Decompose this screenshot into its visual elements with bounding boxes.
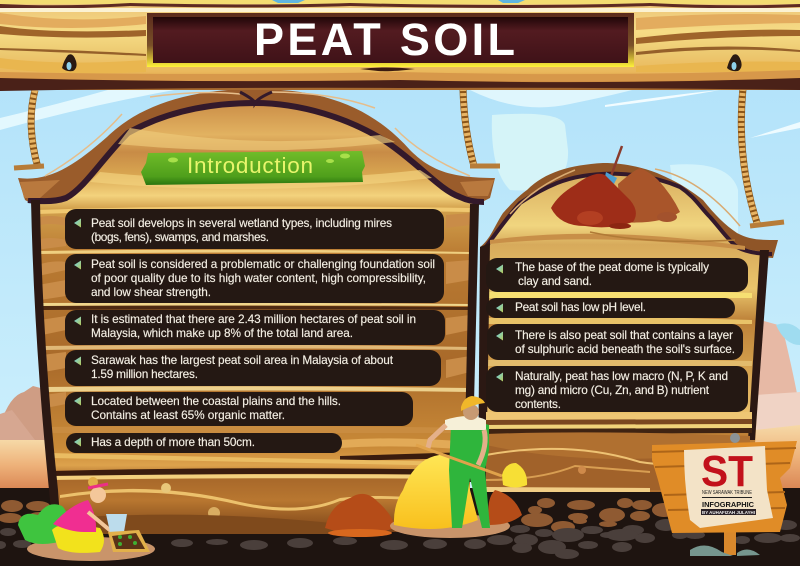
bullet: wetland types: Peat soil develops in several wetland types, including mires	[91, 216, 392, 230]
bullet: peat dome base: The base of the peat dome is typically	[515, 260, 709, 274]
plank streaks	[36, 213, 470, 408]
left sign body	[31, 103, 478, 532]
logo: New Sarawak Tribune wooden signboard	[652, 433, 797, 556]
nail hole left	[62, 54, 77, 71]
bullet: foundation soil	[65, 254, 444, 303]
nail hole right	[727, 54, 742, 71]
desert landscape	[0, 320, 800, 490]
bullet: sulphuric acid: There is also peat soil that contains a layer	[515, 328, 733, 342]
illustration: soil piles with shovel on right sign	[551, 146, 680, 229]
left arch band	[18, 89, 495, 208]
bullet: pH	[486, 298, 735, 318]
bullet: sulphuric acid	[487, 324, 743, 360]
title text: PEAT SOIL	[254, 14, 515, 65]
bullet: location	[65, 392, 413, 426]
bullet: wetland types	[65, 209, 444, 249]
bullet: sulphuric acid: of sulphuric acid beneath the soil's surface.	[515, 342, 735, 356]
title plate	[147, 13, 634, 67]
bullet: Sarawak: Sarawak has the largest peat soil area in Malaysia of about	[91, 353, 394, 367]
logo: New Sarawak Tribune wooden signboard: BY AUHAFIZAH JULAYHI	[702, 510, 755, 515]
bullet: foundation soil: and low shear strength.	[91, 285, 211, 299]
panel: right text bullets	[486, 258, 748, 412]
bullet: foundation soil: Peat soil is considered a problematic or challenging foundation soil	[91, 257, 435, 271]
bullet: location: Located between the coastal plains and the hills.	[91, 394, 341, 408]
bullet: peat dome base	[486, 258, 748, 292]
bullet: nutrients	[486, 366, 748, 412]
logo: New Sarawak Tribune wooden signboard: NEW SARAWAK TRIBUNE	[702, 490, 753, 496]
bullet: nutrients: mg) and micro (Cu, Zn, and B) nutrient	[515, 383, 710, 397]
bullet: location: Contains at least 65% organic matter.	[91, 408, 285, 422]
Introduction green banner	[141, 151, 365, 185]
right arch band	[480, 163, 778, 258]
right sign body	[480, 174, 767, 492]
bullet: hectares in Malaysia	[65, 310, 445, 345]
bullet: pH: Peat soil has low pH level.	[515, 300, 646, 314]
Introduction green banner: Introduction	[187, 153, 313, 178]
panel: right hanging wooden sign	[478, 163, 778, 492]
ground with stones	[0, 488, 800, 566]
logo: New Sarawak Tribune wooden signboard: INFOGRAPHIC	[702, 502, 754, 509]
bullet: foundation soil: of poor quality due to its high water content, high compressibility,	[91, 271, 426, 285]
heading: wooden title beam	[0, 0, 800, 91]
illustration: woman planting seedlings	[18, 477, 155, 561]
illustration: soil pile centre	[325, 494, 395, 537]
panel: left hanging wooden sign	[18, 89, 495, 534]
bullet: nutrients: contents.	[515, 397, 561, 411]
bullet: depth	[66, 433, 342, 453]
bullet: peat dome base: clay and sand.	[518, 274, 592, 288]
illustration: farmer with hay pile	[390, 396, 527, 538]
panel: left text bullets	[65, 209, 445, 453]
bullet: hectares in Malaysia: Malaysia, which make up 8% of the total land area.	[91, 326, 353, 340]
bullet: wetland types: (bogs, fens), swamps, and marshes.	[91, 230, 269, 244]
bullet: Sarawak	[65, 350, 441, 386]
bullet: nutrients: Naturally, peat has low macro (N, P, K and	[515, 369, 728, 383]
logo: New Sarawak Tribune wooden signboard: ST	[701, 447, 753, 496]
bullet: hectares in Malaysia: It is estimated that there are 2.43 million hectares of peat soil in	[91, 312, 416, 326]
bullet: depth: Has a depth of more than 50cm.	[91, 435, 255, 449]
bullet: Sarawak: 1.59 million hectares.	[91, 367, 198, 381]
ropes	[14, 88, 784, 226]
